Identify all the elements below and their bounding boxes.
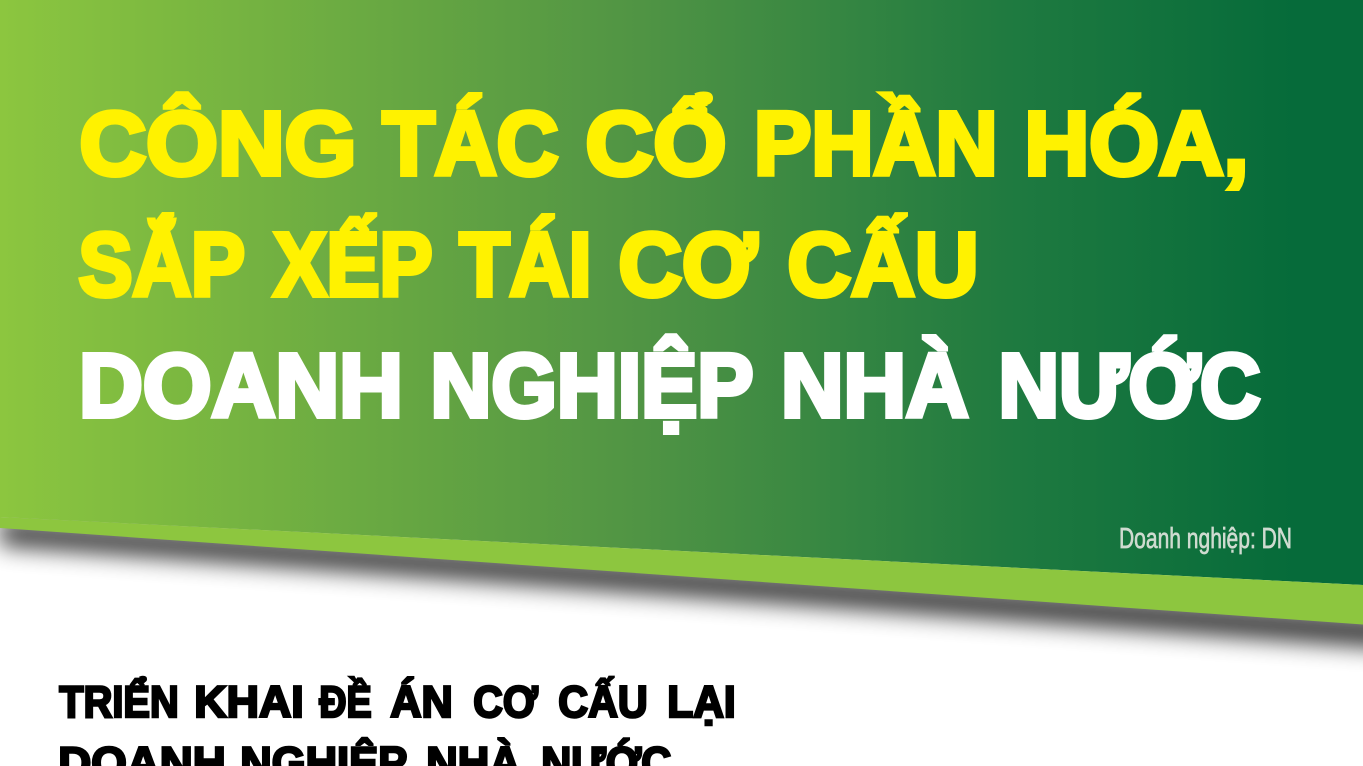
title line 1 [80, 92, 1248, 194]
title line 2: CƠ [618, 216, 757, 316]
heading line 1: ÁN [390, 677, 453, 727]
main title [78, 92, 1260, 436]
title line 2: SẮP [78, 214, 245, 316]
title line 3 [79, 334, 1260, 436]
light green diagonal band [0, 517, 1363, 624]
section heading [58, 676, 736, 766]
title line 1: PHẦN [754, 92, 998, 194]
title line 2 [78, 214, 978, 316]
title line 3: NƯỚC [998, 336, 1260, 436]
abbreviation note: Doanh nghiệp: DN [1119, 523, 1292, 555]
title line 2: CẤU [788, 214, 978, 316]
title line 3: DOANH [79, 336, 403, 436]
heading line 1 [59, 676, 736, 727]
title line 1: HÓA, [1024, 94, 1248, 194]
drop shadow under banner [0, 520, 1363, 650]
heading line 1: TRIỂN [59, 676, 179, 727]
title line 3: NGHIỆP [430, 334, 754, 436]
heading line 1: KHAI [194, 678, 304, 727]
title line 2: TÁI [460, 214, 592, 316]
banner: green gradient panel [0, 0, 1363, 585]
title line 3: NHÀ [781, 336, 968, 436]
title line 2: XẾP [274, 214, 432, 316]
title line 1: CỔ [586, 92, 726, 194]
heading line 2 [58, 738, 671, 766]
title line 1: CÔNG [80, 92, 356, 194]
heading line 1: LẠI [667, 678, 736, 727]
heading line 1: CẤU [558, 677, 648, 727]
heading line 1: CƠ [473, 678, 538, 727]
title line 1: TÁC [382, 94, 558, 194]
heading line 1: ĐỀ [319, 677, 372, 727]
